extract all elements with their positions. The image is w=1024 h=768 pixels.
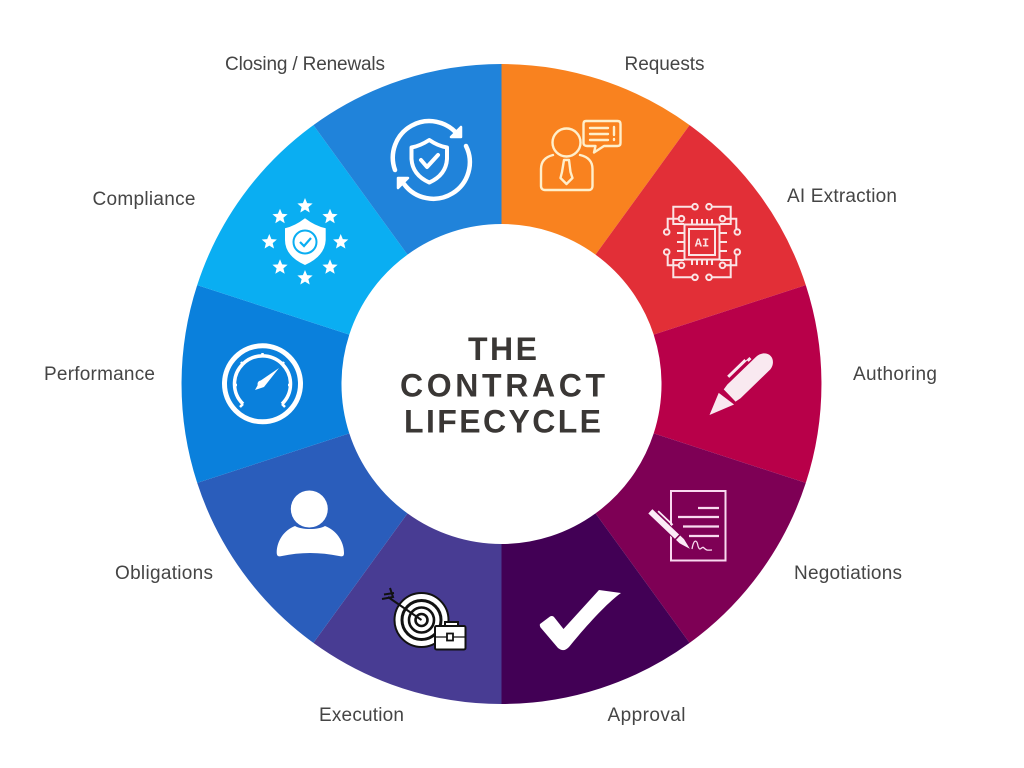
panel: approval xyxy=(502,513,690,704)
label: obligations: Obligations xyxy=(115,563,213,584)
icon: person xyxy=(277,490,344,556)
label: authoring: Authoring xyxy=(853,364,937,385)
panel: obligations xyxy=(197,433,408,643)
panel: requests xyxy=(502,64,690,255)
panel: compliance xyxy=(197,125,408,335)
label: execution: Execution xyxy=(319,705,404,726)
icon: person with speech bubble xyxy=(541,121,620,190)
title: LIFECYCLE xyxy=(404,404,601,440)
icon: pen xyxy=(698,344,777,422)
label: ai extraction: AI Extraction xyxy=(787,186,897,207)
icon: check mark xyxy=(540,590,621,650)
icon: target and briefcase xyxy=(382,588,466,650)
title xyxy=(400,331,605,440)
icon: shield with renewal arrows xyxy=(393,121,470,199)
label: negotiations: Negotiations xyxy=(794,563,902,584)
label: performance: Performance xyxy=(44,364,155,385)
icon: gauge xyxy=(224,346,300,422)
icon: AI chip: AI xyxy=(695,236,709,250)
label: closing / renewals: Closing / Renewals xyxy=(225,54,385,75)
label: approval: Approval xyxy=(608,705,686,726)
icon: signed document xyxy=(648,491,726,560)
panel: ai extraction xyxy=(596,125,806,335)
panel: authoring xyxy=(654,285,821,483)
panel: execution xyxy=(313,513,502,704)
icon: AI chip xyxy=(664,204,740,280)
title: THE xyxy=(468,331,537,367)
icon: shield with stars xyxy=(262,198,348,284)
label: requests: Requests xyxy=(624,54,704,75)
panel: closing / renewals xyxy=(313,64,502,255)
panel: performance xyxy=(182,285,349,483)
label: compliance: Compliance xyxy=(92,189,196,210)
title: CONTRACT xyxy=(400,368,605,404)
panel: negotiations xyxy=(596,433,806,643)
